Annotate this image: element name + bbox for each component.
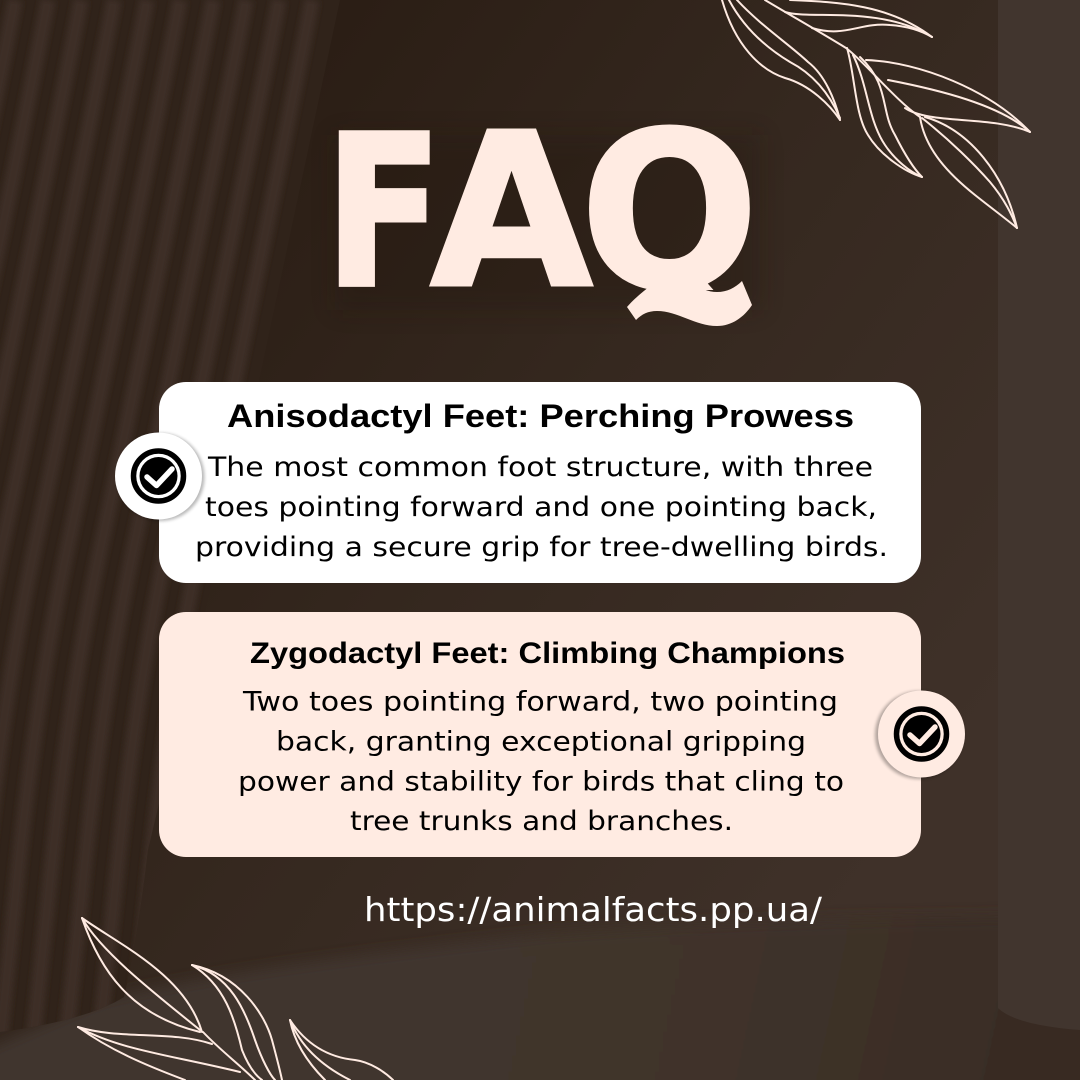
panel background <box>159 612 921 857</box>
panel: Anisodactyl feet <box>159 382 921 583</box>
panel: Zygodactyl feet <box>159 612 921 857</box>
title: FAQ: Q <box>580 87 759 339</box>
right pillar <box>998 0 1080 1030</box>
panel text: providing a secure grip for tree-dwelling birds. <box>195 532 888 563</box>
panel text: Two toes pointing forward, two pointing <box>242 686 838 718</box>
panel background <box>159 382 921 583</box>
panel text: back, granting exceptional gripping <box>276 726 806 758</box>
website url: https://animalfacts.pp.ua/ <box>364 890 823 929</box>
icon: check badge, first panel <box>115 432 204 521</box>
panel heading: Zygodactyl Feet: Climbing Champions <box>250 637 845 670</box>
panel text <box>195 452 888 563</box>
curtain folds <box>0 0 345 1040</box>
panel text: power and stability for birds that cling to <box>238 766 844 798</box>
panel text: tree trunks and branches. <box>350 806 733 837</box>
panel text: The most common foot structure, with three <box>207 452 873 483</box>
panel text: toes pointing forward and one pointing back, <box>205 492 877 523</box>
title: FAQ <box>338 124 752 326</box>
floor <box>0 915 1080 1080</box>
title: FAQ: F <box>325 91 442 334</box>
panel text <box>238 686 844 837</box>
leaf decoration: bottom left <box>78 918 393 1080</box>
title: FAQ: A <box>430 88 593 335</box>
panel heading: Anisodactyl Feet: Perching Prowess <box>227 398 854 434</box>
leaf decoration: top right <box>722 0 1030 228</box>
icon: check badge, second panel <box>875 690 965 779</box>
